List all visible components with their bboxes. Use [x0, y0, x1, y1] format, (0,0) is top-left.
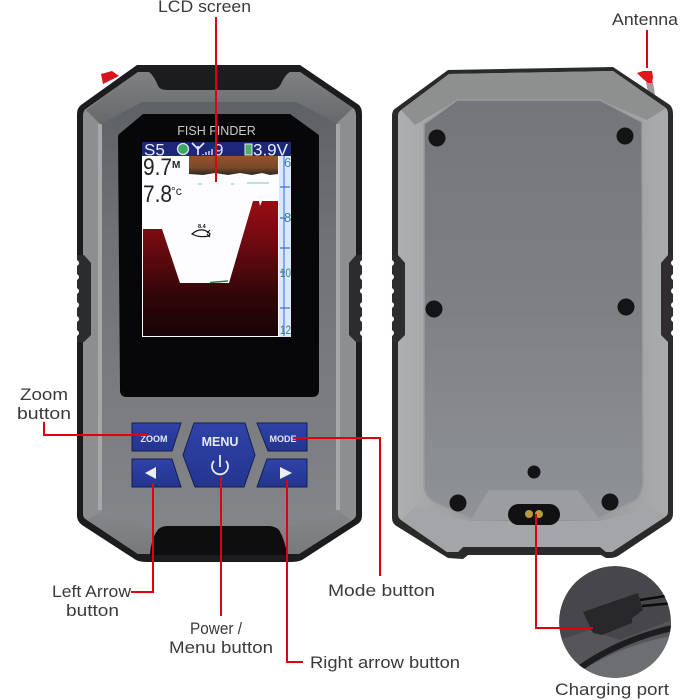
front face: side ridges	[100, 124, 338, 510]
button: mode: MODE	[270, 434, 296, 444]
inset: connector	[583, 593, 643, 635]
callout lines	[44, 17, 647, 662]
inset: ledge	[559, 620, 672, 668]
bezel label: FISH FINDER: FISH FINDER	[177, 124, 256, 138]
button: zoom: ZOOM	[140, 434, 168, 444]
button: left arrow	[132, 459, 181, 487]
inset: charging cable photo	[559, 566, 671, 678]
LCD bottom green line	[210, 281, 228, 282]
back shell: top bevel	[401, 71, 666, 125]
LCD depth scale: 12	[280, 323, 291, 337]
button: mode	[257, 423, 307, 451]
line: LCD screen	[215, 17, 217, 182]
label: power / menu button: Power /	[190, 619, 242, 638]
LCD depth scale: 8	[284, 210, 291, 225]
LCD white background	[142, 156, 280, 337]
label: zoom button: button	[17, 404, 71, 423]
label: charging port: Charging port	[555, 680, 669, 699]
LCD display	[142, 140, 291, 337]
LCD status bar	[142, 140, 291, 160]
front face: centre panel	[100, 102, 338, 531]
body: black casing back	[392, 67, 673, 559]
line: mode button	[293, 438, 380, 576]
bottom black cap	[150, 526, 287, 555]
LCD depth readout: 9.7	[143, 154, 172, 181]
back shell: notch plate	[472, 491, 598, 520]
back inner panel	[424, 100, 643, 519]
LCD depth unit: M	[172, 160, 180, 171]
button: menu and power: MENU	[202, 435, 238, 449]
label: mode button: Mode button	[328, 581, 435, 600]
label: left arrow button	[52, 582, 132, 620]
line: right arrow button	[287, 480, 303, 662]
line: charging port	[536, 514, 593, 628]
inset: black rim	[580, 628, 672, 668]
label: zoom button: Zoom	[20, 385, 68, 404]
screen bezel	[118, 114, 319, 397]
device: front view	[77, 65, 362, 562]
LCD depth scale: 10	[280, 266, 291, 280]
side grip scallops	[73, 260, 677, 336]
line: left arrow button	[131, 483, 153, 592]
LCD status bar: 9	[214, 140, 223, 160]
LCD temperature unit: °c	[171, 184, 182, 198]
button: menu and power	[183, 423, 255, 487]
LCD faint fish marks	[198, 183, 269, 184]
LCD depth scale	[279, 155, 291, 337]
label: right arrow button: Right arrow button	[310, 653, 460, 672]
front face: grey side strips	[83, 72, 356, 554]
label: left arrow button: button	[66, 601, 119, 620]
back: right side grip	[661, 255, 673, 342]
screw holes	[426, 128, 634, 512]
charging port contacts	[508, 504, 560, 525]
antenna: back stem	[646, 82, 655, 95]
LCD depth scale: 6	[284, 155, 291, 170]
antenna: back red tip	[637, 71, 653, 83]
line: zoom button	[44, 422, 148, 435]
back shell: lower curved plate	[401, 507, 665, 552]
button: zoom	[132, 423, 181, 451]
label: left arrow button: Left Arrow	[52, 582, 132, 601]
front face: bottom bevel	[87, 510, 351, 554]
buttons	[132, 423, 307, 487]
back shell: light bevel	[398, 71, 668, 552]
casing: left side grip	[77, 255, 91, 342]
label: power / menu button: Menu button	[169, 638, 273, 657]
line: antenna	[646, 30, 648, 68]
label: power / menu button	[169, 619, 273, 657]
inset: cable	[640, 595, 674, 606]
LCD sonar bottom profile	[143, 201, 278, 336]
LCD temperature readout: 7.8	[143, 181, 172, 208]
LCD fish icon: 8.4	[198, 224, 207, 230]
label: antenna: Antenna	[612, 10, 679, 29]
line: power / menu button	[220, 477, 222, 616]
LCD status bar: 3.9V	[253, 140, 289, 160]
device: back view	[392, 67, 673, 559]
back: left side grip	[392, 255, 405, 342]
casing: right side grip	[349, 255, 362, 342]
LCD fish icon	[192, 224, 210, 237]
antenna: front red tip	[101, 71, 119, 84]
inset: lower curved edge	[584, 636, 670, 678]
LCD surface clutter strip	[189, 156, 278, 175]
body: black rugged casing	[77, 65, 362, 562]
button: right arrow	[257, 459, 307, 487]
LCD status bar: S5	[144, 140, 165, 160]
front face: top bevel	[86, 72, 353, 124]
label: zoom button	[17, 385, 71, 423]
